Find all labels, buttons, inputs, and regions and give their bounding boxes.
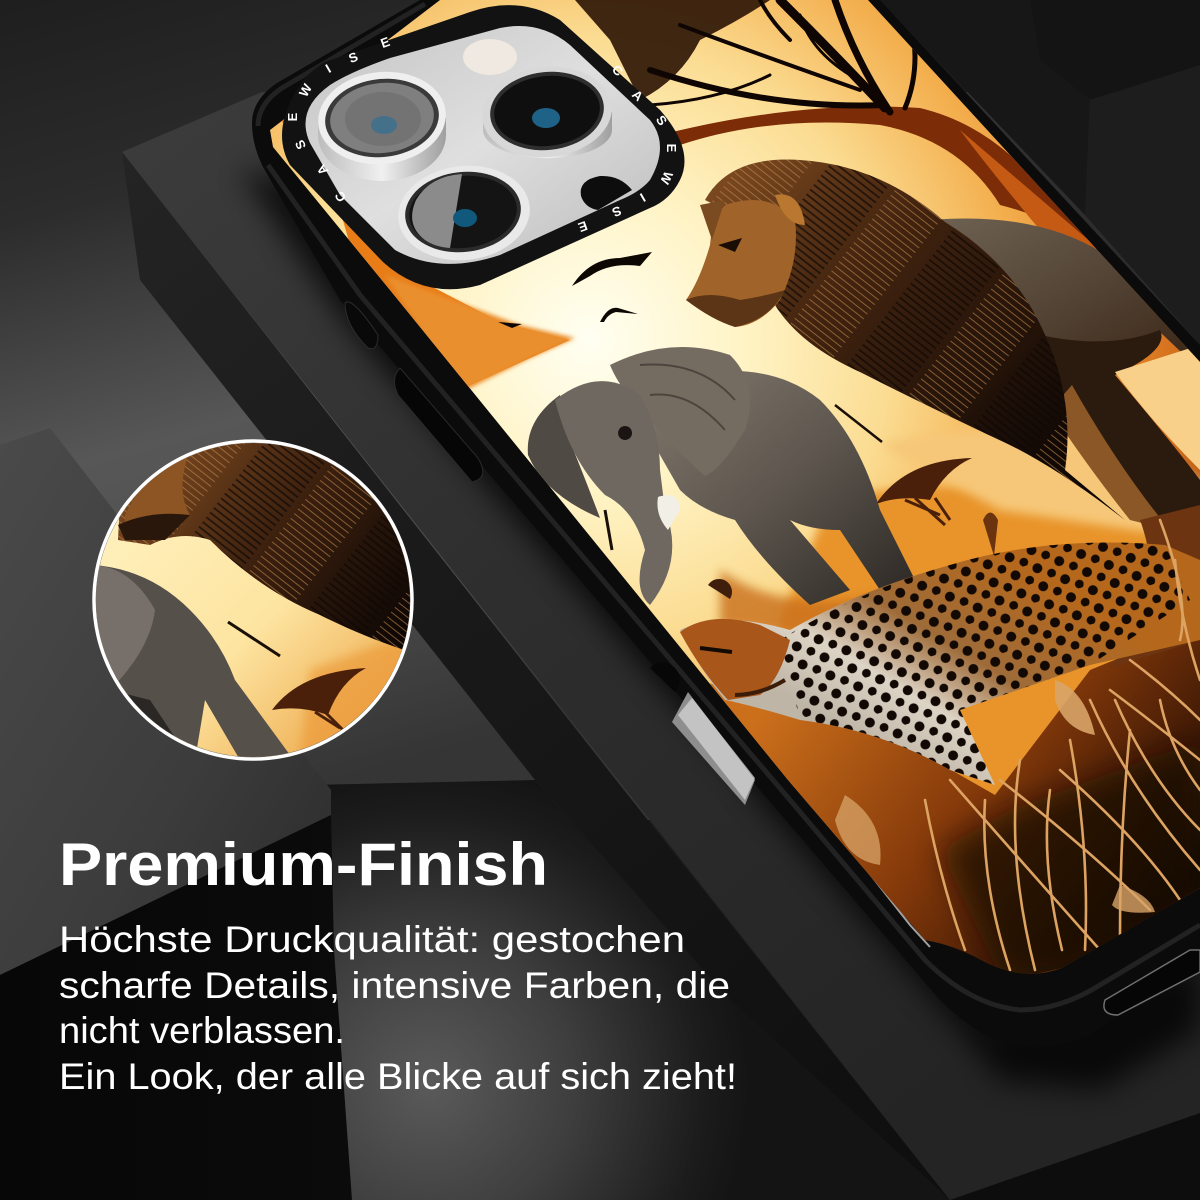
island: brand ring text: I <box>323 61 334 76</box>
phone shadow <box>240 170 1200 1090</box>
island: brand ring text: A <box>313 161 331 178</box>
circle: elephant <box>90 565 290 760</box>
island: brand ring text: E <box>379 34 392 51</box>
block: left lower front face <box>0 815 352 1200</box>
circle: muzzle <box>118 514 190 540</box>
lens: top-left <box>314 66 450 181</box>
island: brand ring text: W <box>296 81 315 99</box>
island: brand ring text: A <box>629 87 647 104</box>
island: brand ring text: S <box>653 112 670 128</box>
lidar sensor <box>581 176 632 210</box>
background floor <box>0 0 700 820</box>
phone case body <box>252 0 1200 1048</box>
block: right upper <box>1085 65 1200 345</box>
case: glossy rim <box>258 4 1200 1010</box>
artwork: orange left strip behind island <box>282 119 570 386</box>
side button: volume <box>394 368 483 482</box>
artwork: elephant <box>528 347 915 605</box>
circle: white outline <box>94 441 412 759</box>
island: brand ring text: I <box>637 190 648 205</box>
flash <box>463 39 517 75</box>
artwork: lion head <box>686 194 805 327</box>
island: brand ring text: S <box>292 137 309 152</box>
elephant head and trunk <box>555 381 672 605</box>
phone artwork: savanna print <box>270 0 1200 974</box>
artwork: sky glow <box>270 0 1200 974</box>
title: Premium-Finish <box>59 831 548 898</box>
body text: scharfe Details, intensive Farben, die <box>59 965 730 1006</box>
artwork: tree <box>650 0 915 112</box>
block: bottom right shadow corner <box>950 1113 1200 1200</box>
lens: bottom <box>393 159 535 267</box>
artwork: golden lower hill <box>780 487 1200 900</box>
lens: top-right <box>478 60 616 164</box>
elephant ear right <box>610 347 750 476</box>
artwork: small acacia <box>876 458 998 556</box>
side buttons and ports <box>345 302 1200 1015</box>
island: black frame <box>282 5 684 289</box>
artwork: birds <box>498 252 652 328</box>
artwork: right side sun ring <box>660 107 1090 240</box>
artwork: golden grass blades <box>925 520 1200 970</box>
island: brand ring text: E <box>576 218 589 235</box>
island: glass plate <box>306 26 660 264</box>
artwork: lion body <box>930 218 1200 370</box>
circle: sky <box>90 440 420 760</box>
circle: mini acacia <box>272 668 366 715</box>
body text: Höchste Druckqualität: gestochen <box>59 919 685 960</box>
artwork: tree canopy <box>575 0 770 100</box>
body text: nicht verblassen. <box>59 1010 345 1051</box>
elephant ear left <box>528 395 600 518</box>
artwork: dark grass shadow <box>940 740 1200 975</box>
island: brand ring text <box>285 34 679 235</box>
artwork: lion mane <box>705 160 1125 520</box>
artwork: foreground grass ground <box>700 625 1200 985</box>
artwork: left dune <box>385 275 575 392</box>
island: brand ring text: E <box>664 144 679 153</box>
block: left lower top face <box>0 428 331 975</box>
charge port <box>1104 950 1200 1015</box>
island: brand ring text: E <box>285 112 300 121</box>
block: light pool wall <box>310 780 950 1200</box>
island: brand ring text: S <box>610 203 624 220</box>
artwork: grass seed heads <box>835 680 1155 913</box>
zoom circle: print detail <box>90 435 420 760</box>
side button: camera control silver <box>672 692 755 805</box>
block: central plinth side face <box>122 152 950 1200</box>
island: brand ring text: C <box>331 188 349 205</box>
island: brand ring text: W <box>657 169 676 187</box>
body text <box>59 919 737 1097</box>
island: brand ring text: C <box>609 62 627 79</box>
island: brand ring text: S <box>346 49 360 66</box>
artwork: leopard <box>680 542 1200 785</box>
body text: Ein Look, der alle Blicke auf sich zieht! <box>59 1056 737 1097</box>
side button: action switch <box>345 302 378 349</box>
camera island <box>282 5 684 289</box>
circle: lion mane <box>118 435 420 655</box>
